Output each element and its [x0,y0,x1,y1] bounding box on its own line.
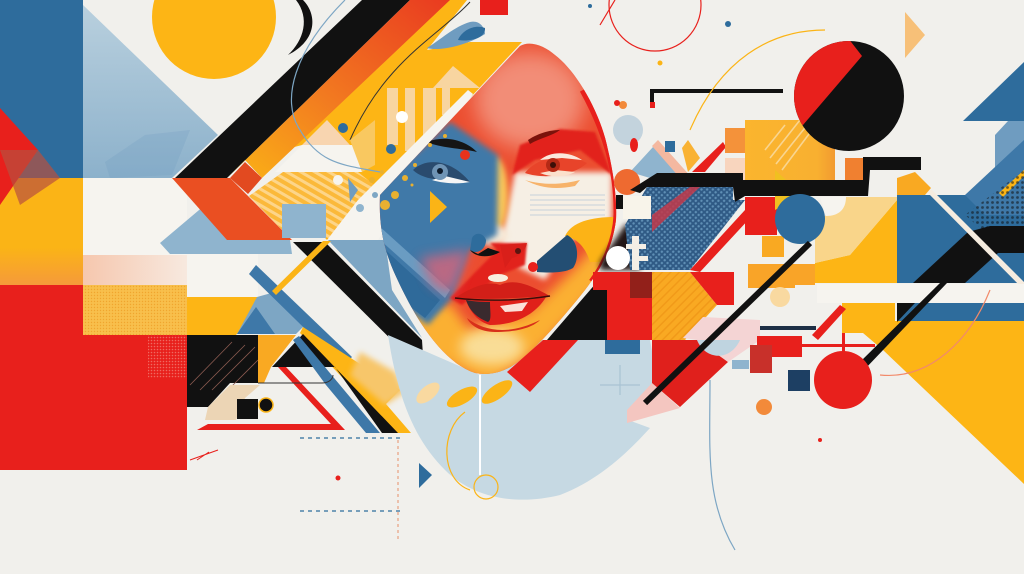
face: blue left half [375,122,498,325]
panel: black stepped bar [616,91,921,209]
white diagonal beam [327,90,473,240]
face: left eye [413,139,477,183]
panel: yellow field left of face [245,0,522,240]
face: red brow area [512,129,612,175]
face: lips [455,282,550,332]
panel: light blue shape under diagonal stripes [160,205,292,254]
face: yellow nose ridge [493,154,512,229]
illustration: leaves under chin [413,375,516,499]
face: yellow jaw [412,234,614,374]
panel: diagonal stripes upper left [172,0,508,240]
face: nose [470,234,527,282]
face: navy half disc [537,235,577,273]
illustration: pale neck and shoulder [388,335,660,500]
panel: red bars and circle lower right [750,287,875,415]
panel: left colour blocks [0,0,218,470]
face: lines on cheek [530,195,605,215]
illustration: woman's face [380,44,616,374]
panel: lower left triangles [187,327,411,460]
icon: yellow triangle top right [905,12,925,58]
icon: yellow arrow on cheek [430,191,447,223]
face: right eye [525,130,587,188]
panel: dark shape right of jaw [507,225,645,392]
panel: right centre collage [593,101,777,423]
icon: red and black circle [790,38,904,151]
icon: black crescent [288,0,312,55]
panel: central blue diagonal cluster [187,240,424,372]
face: pale cheek [500,172,612,280]
long black diagonal line [645,243,810,403]
illustration: gold splatter on face diagonal [356,134,447,212]
icon: yellow sun circle [152,0,276,79]
face: right hair edge [583,90,617,282]
decorative thin lines and dots [291,0,990,550]
icon: small blue triangle [419,463,432,488]
face: red mid panel [450,243,527,305]
panel: right edge shapes [817,62,1024,484]
icon: blue circle [775,194,825,244]
panel: striped house shape beside face [333,66,480,202]
panel: yellow blocks right [725,120,897,288]
